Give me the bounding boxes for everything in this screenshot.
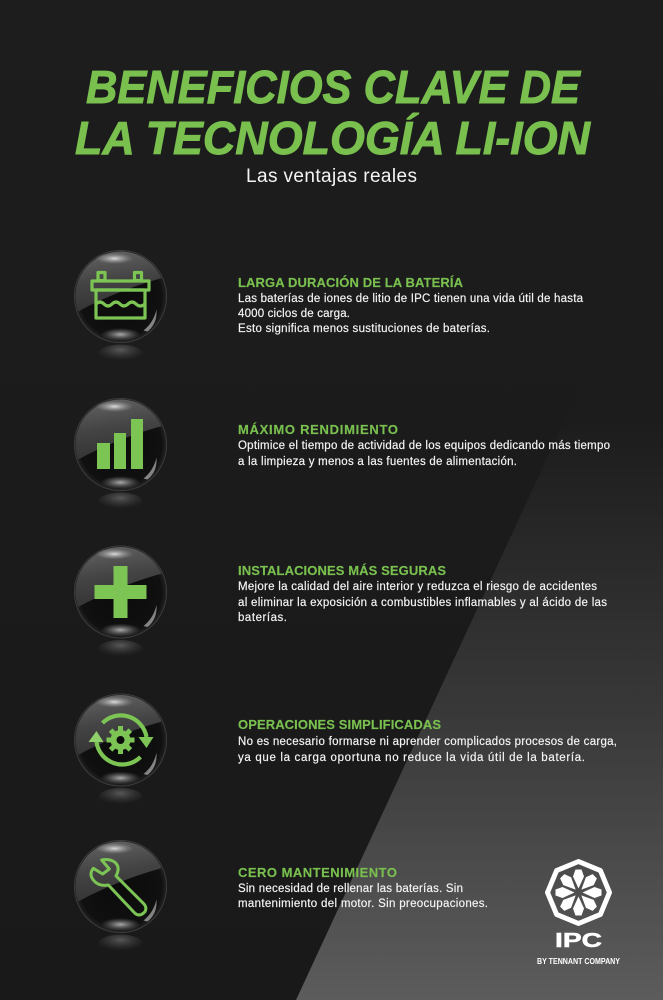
body text: baterías. bbox=[238, 612, 287, 624]
body text: Optimice el tiempo de actividad de los equipos dedicando más tiempo bbox=[238, 440, 610, 452]
body text bbox=[238, 883, 488, 910]
panel: larga duración bbox=[74, 246, 584, 362]
body text: Esto significa menos sustituciones de baterías. bbox=[238, 323, 490, 335]
icon: battery bbox=[74, 246, 168, 362]
panel: cero mantenimiento bbox=[74, 836, 488, 952]
logo wordmark: IPC bbox=[555, 930, 602, 952]
logo tagline: BY TENNANT COMPANY bbox=[537, 957, 621, 966]
heading: OPERACIONES SIMPLIFICADAS bbox=[238, 717, 441, 732]
title: BENEFICIOS CLAVE DE bbox=[86, 61, 581, 113]
body text: Mejore la calidad del aire interior y reduzca el riesgo de accidentes bbox=[238, 581, 597, 593]
heading: INSTALACIONES MÁS SEGURAS bbox=[238, 563, 446, 578]
body text: Las baterías de iones de litio de IPC tienen una vida útil de hasta bbox=[238, 293, 584, 305]
body text bbox=[238, 293, 584, 335]
heading: CERO MANTENIMIENTO bbox=[238, 865, 397, 880]
icon: bar chart bbox=[74, 394, 168, 510]
title: LA TECNOLOGÍA LI-ION bbox=[75, 112, 591, 164]
body text: al eliminar la exposición a combustibles inflamables y al ácido de las bbox=[238, 597, 607, 609]
icon: wrench bbox=[74, 836, 168, 952]
body text bbox=[238, 736, 617, 764]
body text: ya que la carga oportuna no reduce la vida útil de la batería. bbox=[238, 752, 585, 764]
heading: MÁXIMO RENDIMIENTO bbox=[238, 422, 398, 437]
diagonal grey wedge bbox=[296, 208, 663, 1000]
body text: No es necesario formarse ni aprender complicados procesos de carga, bbox=[238, 736, 617, 748]
icon: octagon emblem bbox=[548, 862, 610, 924]
body text: mantenimiento del motor. Sin preocupaciones. bbox=[238, 898, 488, 910]
heading: LARGA DURACIÓN DE LA BATERÍA bbox=[238, 275, 464, 290]
body text: a la limpieza y menos a las fuentes de alimentación. bbox=[238, 456, 517, 468]
subtitle: Las ventajas reales bbox=[246, 166, 417, 187]
body text: 4000 ciclos de carga. bbox=[238, 308, 350, 320]
panel: máximo rendimiento bbox=[74, 394, 610, 510]
title bbox=[75, 61, 591, 164]
body text bbox=[238, 581, 607, 624]
body text bbox=[238, 440, 610, 468]
panel: instalaciones más seguras bbox=[74, 542, 607, 658]
icon: gear with arrows bbox=[74, 690, 168, 806]
icon: plus bbox=[74, 542, 168, 658]
panel: operaciones simplificadas bbox=[74, 690, 617, 806]
logo: IPC bbox=[537, 862, 621, 966]
body text: Sin necesidad de rellenar las baterías. Sin bbox=[238, 883, 463, 895]
